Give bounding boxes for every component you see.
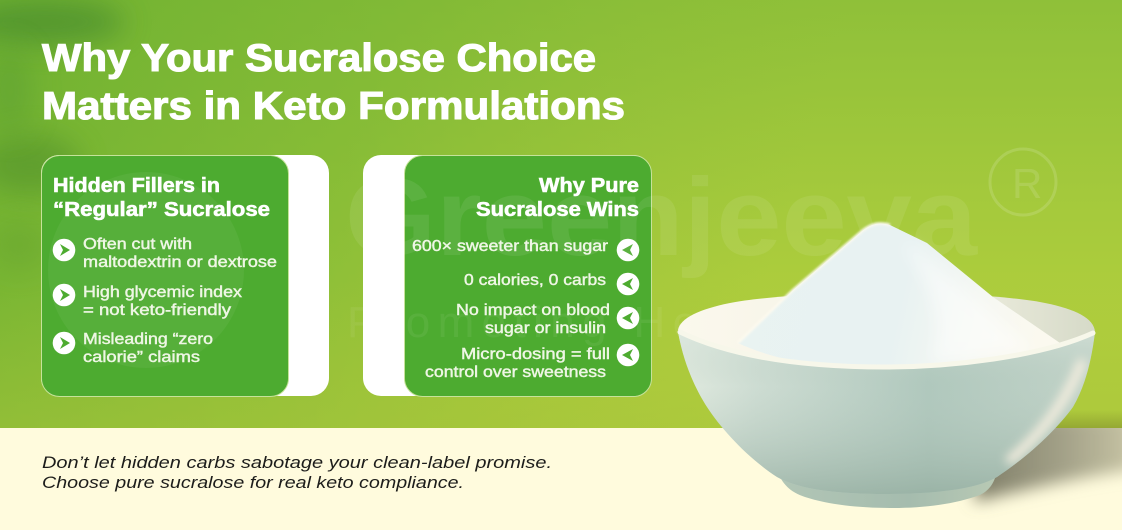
item: sweetness: 600× sweeter than sugar — [412, 238, 608, 255]
item: micro-dosing — [425, 344, 639, 381]
icon: bowl of sucralose — [670, 223, 1100, 508]
heading: hidden fillers — [53, 175, 270, 221]
item: glycemic index: High glycemic index — [83, 284, 242, 301]
footer message — [42, 453, 552, 492]
heading: hidden fillers: “Regular” Sucralose — [53, 199, 270, 221]
title: Matters in Keto Formulations — [42, 85, 625, 128]
white backing card — [363, 155, 651, 396]
item: sweetness — [412, 238, 639, 261]
green card — [42, 156, 288, 396]
item: no blood sugar impact: sugar or insulin — [485, 320, 606, 337]
item: glycemic index: = not keto-friendly — [83, 302, 231, 319]
item: cut with fillers: Often cut with — [83, 236, 192, 253]
item: misleading claims — [53, 331, 213, 366]
item: cut with fillers — [53, 236, 277, 271]
item: zero calories: 0 calories, 0 carbs — [464, 272, 606, 289]
title: Why Your Sucralose Choice — [42, 37, 596, 80]
rim highlight — [680, 332, 1093, 367]
title — [42, 37, 625, 128]
footer message: Choose pure sucralose for real keto compliance. — [42, 473, 464, 492]
panel: hidden fillers — [41, 155, 329, 396]
green card — [404, 156, 652, 396]
watermark: Greenjeeva logo: Promoting Healthy — [347, 298, 827, 347]
item: misleading claims: calorie” claims — [83, 349, 200, 366]
watermark: Greenjeeva logo: R — [1012, 160, 1042, 207]
bowl body — [678, 334, 1095, 494]
bowl foot — [777, 470, 997, 508]
item: micro-dosing: control over sweetness — [425, 364, 606, 381]
watermark: Greenjeeva logo: Greenjeeva — [345, 156, 978, 279]
heading: pure wins — [476, 175, 639, 221]
heading: pure wins: Why Pure — [539, 175, 639, 197]
cream footer band — [0, 428, 1122, 530]
heading: pure wins: Sucralose Wins — [476, 199, 639, 221]
watermark: Greenjeeva logo — [345, 149, 1056, 347]
sugar pile — [738, 223, 1060, 370]
footer message: Don’t let hidden carbs sabotage your clean-label promise. — [42, 453, 552, 472]
heading: hidden fillers: Hidden Fillers in — [53, 175, 220, 197]
item: misleading claims: Misleading “zero — [83, 331, 213, 348]
item: no blood sugar impact — [456, 302, 639, 337]
item: cut with fillers: maltodextrin or dextrose — [83, 254, 277, 271]
item: glycemic index — [53, 284, 242, 319]
bowl shadow — [975, 415, 1122, 502]
panel: pure sucralose — [363, 155, 652, 396]
item: micro-dosing: Micro-dosing = full — [461, 346, 610, 363]
bowl inside — [678, 293, 1095, 366]
faded leaf logo — [48, 172, 244, 368]
item: no blood sugar impact: No impact on blood — [456, 302, 610, 319]
white backing card — [41, 155, 329, 396]
item: zero calories — [464, 272, 639, 295]
